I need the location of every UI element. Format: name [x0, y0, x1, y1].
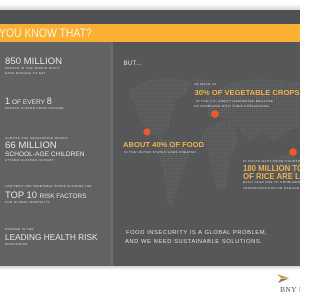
callout: 180 million tonnes of rice: TRANSPORTATION OR DAMAGE	[243, 186, 299, 190]
callout: about 40% of food: IN THE UNITED STATES GOES UNEATEN	[124, 150, 196, 154]
callout: 180 million tonnes of rice	[243, 160, 300, 190]
label: but: BUT...	[124, 61, 142, 67]
dark background panel	[0, 10, 300, 266]
bottom shadow strip	[0, 266, 300, 270]
stat: top 10 risk factors	[5, 184, 92, 204]
stat: leading health risk	[5, 227, 98, 246]
callout: 30% of vegetable crops: OF PROBLEMS WITH THEIR APPEARANCE	[194, 104, 269, 108]
stat: 850 million: 850 MILLION	[5, 56, 62, 67]
stat: 66 million: SCHOOL-AGE CHILDREN	[5, 150, 85, 158]
stat: 850 million: HAVE ENOUGH TO EAT	[5, 70, 46, 74]
marker: USA	[144, 128, 150, 136]
stat: 850 million	[5, 56, 62, 74]
heading band	[0, 24, 300, 42]
callout: about 40% of food: ABOUT 40% OF FOOD	[123, 140, 204, 149]
marker: Asia	[289, 148, 297, 156]
stat: leading health risk: HUNGER IS THE	[5, 227, 34, 231]
column divider	[110, 42, 113, 266]
stat: leading health risk: LEADING HEALTH RISK	[5, 232, 98, 242]
marker: Europe	[211, 110, 219, 118]
callout: 30% of vegetable crops	[194, 83, 300, 108]
callout: about 40% of food	[123, 140, 204, 154]
stat: top 10 risk factors: FOR GLOBAL MORTALITY	[5, 200, 50, 204]
stat: top 10 risk factors: LOW FRUIT AND VEGETABLE INTAKE IS AMONG THE	[5, 184, 92, 188]
callout: 30% of vegetable crops: IN THE U.S. AREN'T HARVESTED BECAUSE	[196, 98, 273, 102]
logo: BNY	[277, 274, 300, 294]
top shadow strip	[0, 0, 300, 10]
conclusion text: FOOD INSECURITY IS A GLOBAL PROBLEM,	[126, 230, 267, 236]
world map	[128, 78, 299, 205]
stat: 1 of every 8: 1 OF EVERY 8	[5, 96, 52, 106]
left column panel	[0, 42, 113, 266]
conclusion text: AND WE NEED SUSTAINABLE SOLUTIONS.	[125, 239, 262, 245]
stat: top 10 risk factors: TOP 10 RISK FACTORS	[5, 188, 86, 200]
icon: logo arrow	[277, 274, 289, 283]
upper strip	[0, 10, 300, 24]
stat: 66 million: ACROSS THE DEVELOPING WORLD	[5, 136, 68, 140]
heading: YOU KNOW THAT?	[0, 26, 92, 40]
stat: 850 million: PEOPLE IN THE WORLD DON'T	[5, 66, 60, 70]
stat: 66 million: 66 MILLION	[5, 140, 57, 151]
conclusion text	[125, 230, 267, 245]
callout: 180 million tonnes of rice: EACH YEAR DUE TO PROBLEMS	[243, 180, 300, 184]
stat: 66 million	[5, 136, 85, 162]
stat: leading health risk: WORLDWIDE	[5, 242, 28, 246]
stat: 1 of every 8: PEOPLE SUFFER FROM HUNGER	[5, 106, 64, 110]
callout: 30% of vegetable crops: 30% OF VEGETABLE CROPS	[194, 88, 299, 97]
stat: 1 of every 8	[5, 96, 64, 110]
stat: 66 million: ATTEND CLASSES HUNGRY	[5, 158, 54, 162]
